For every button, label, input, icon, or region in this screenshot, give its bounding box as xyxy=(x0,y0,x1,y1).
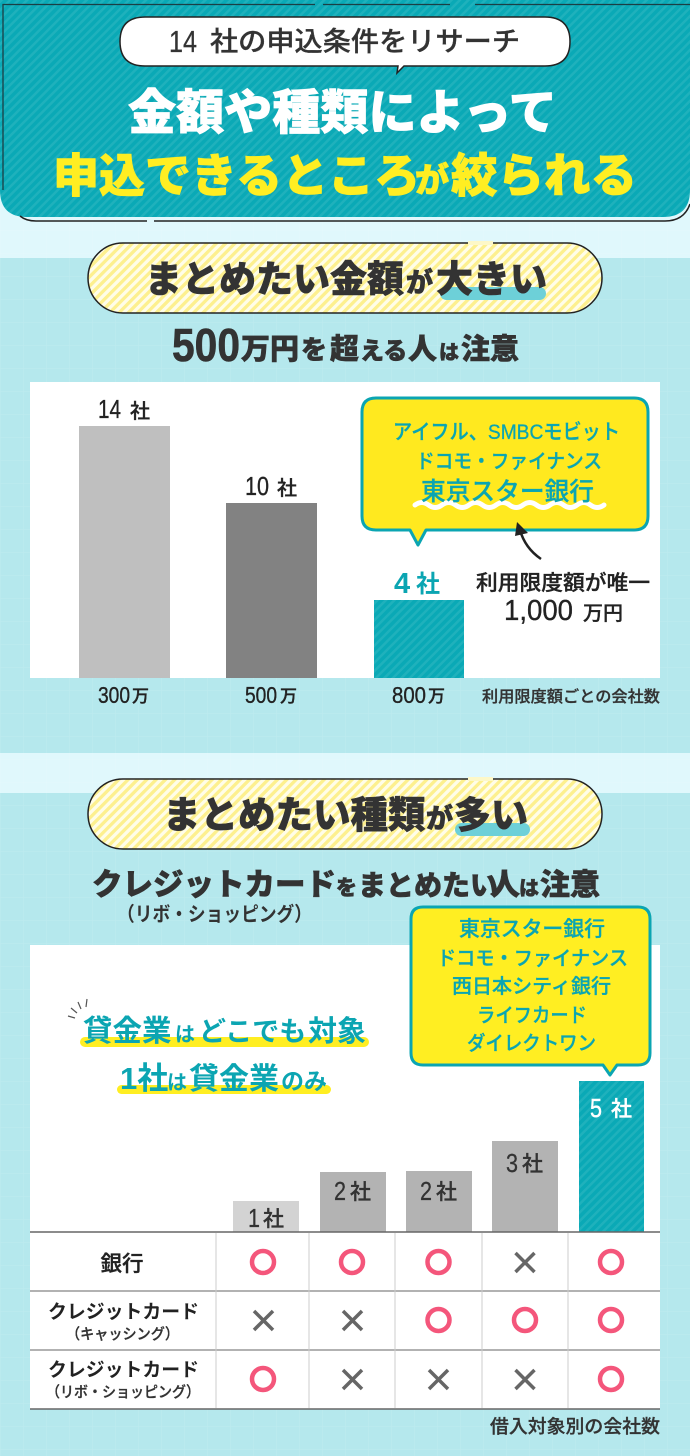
annotation: only 10 million limit xyxy=(476,572,650,627)
section heading pill: types xyxy=(88,777,602,849)
section subtitle: credit card: （リボ・ショッピング） xyxy=(117,902,312,926)
section subtitle: over 5 million yen: を xyxy=(301,335,327,365)
arrow to callout xyxy=(515,522,541,559)
section subtitle: credit card: 人 xyxy=(490,869,520,902)
row labels: （キャッシング） xyxy=(66,1326,179,1343)
row labels xyxy=(46,1252,200,1401)
row labels: クレジットカード xyxy=(48,1301,199,1323)
speech pill: 14 companies researched: 14 xyxy=(169,24,197,59)
callout: five companies xyxy=(411,907,650,1075)
callout: text with emphasis xyxy=(68,999,369,1096)
bar: 800万 4社: 4 xyxy=(394,568,410,600)
bar: 2社: 社 xyxy=(350,1181,371,1204)
sparkle accent xyxy=(68,999,87,1018)
bar: 3社: 社 xyxy=(522,1153,543,1176)
bar: 500万 10社: 10 xyxy=(245,471,269,501)
header banner xyxy=(0,0,690,221)
axis labels: 300 xyxy=(98,682,130,708)
callout: companies: ドコモ・ファイナンス xyxy=(416,451,602,473)
title line 1: 金額や種類によって xyxy=(128,87,557,140)
bar: 2社 xyxy=(406,1171,472,1232)
bar: 5社: 5 xyxy=(590,1093,602,1123)
callout: text with emphasis: のみ xyxy=(281,1068,327,1094)
bar: 800万 4社: 社 xyxy=(416,571,440,598)
row labels: 銀行 xyxy=(100,1252,144,1276)
row labels: クレジットカード xyxy=(48,1359,199,1381)
section subtitle: over 5 million yen: は xyxy=(439,342,459,364)
marker highlight xyxy=(440,287,546,300)
bar: 800万 4社 xyxy=(374,568,464,678)
callout: companies xyxy=(362,398,648,545)
callout: text with emphasis: 貸金業 xyxy=(189,1063,279,1096)
section subtitle: credit card xyxy=(92,868,600,926)
footnote: 借入対象別の会社数 xyxy=(490,1416,660,1437)
circle marks xyxy=(252,1251,622,1390)
section subtitle: credit card: 注意 xyxy=(540,869,600,902)
axis labels xyxy=(98,682,660,708)
section heading pill: amount: まとめたい金額 xyxy=(145,259,404,300)
axis labels: 800 xyxy=(392,682,426,708)
axis labels: 500 xyxy=(245,682,277,708)
bar: 5社: 社 xyxy=(611,1098,632,1121)
section heading pill: types: 多い xyxy=(454,795,528,836)
section subtitle: credit card: を xyxy=(336,877,357,900)
section subtitle: over 5 million yen: える xyxy=(360,338,407,365)
title line 2: 申込できるところ xyxy=(53,150,420,202)
section heading pill: amount: 大きい xyxy=(436,259,547,300)
bar: 1社: 1 xyxy=(248,1203,260,1233)
section subtitle: credit card: は xyxy=(519,878,539,900)
section subtitle: credit card: クレジットカード xyxy=(92,868,336,902)
section heading pill: types: が xyxy=(426,803,453,834)
annotation: only 10 million limit: 利用限度額が唯一 xyxy=(476,572,650,595)
section subtitle: credit card: まとめたい xyxy=(358,870,498,901)
section subtitle: over 5 million yen: 人 xyxy=(408,334,437,366)
axis labels: 万 xyxy=(280,687,297,706)
section heading pill: amount xyxy=(88,241,602,313)
row labels: （リボ・ショッピング） xyxy=(46,1384,200,1401)
annotation: only 10 million limit: 万円 xyxy=(583,603,623,625)
bar: 3社 xyxy=(492,1141,558,1232)
cross marks xyxy=(254,1253,534,1389)
bar: 2社: 2 xyxy=(420,1176,432,1206)
bar: 300万 14社 xyxy=(79,394,170,678)
panel: card type chart xyxy=(30,945,660,1409)
title line 2: 絞られる xyxy=(451,150,637,202)
title line 2: が xyxy=(415,161,449,200)
bar: 3社: 3 xyxy=(506,1148,518,1178)
bar: 300万 14社: 14 xyxy=(98,394,121,424)
section heading pill: types: まとめたい種類 xyxy=(163,794,426,836)
bar: 500万 10社 xyxy=(226,471,317,678)
axis labels: 万 xyxy=(132,687,149,706)
underlines xyxy=(80,1037,369,1047)
bar: 500万 10社: 社 xyxy=(277,477,297,500)
panel: limit bar chart xyxy=(30,382,660,678)
marker highlight xyxy=(455,823,530,836)
callout: text with emphasis: は xyxy=(167,1072,187,1094)
axis labels: 万 xyxy=(428,687,445,706)
speech pill: 14 companies researched xyxy=(120,17,570,73)
callout: text with emphasis: 対象 xyxy=(308,1015,366,1048)
comparison table xyxy=(30,1232,660,1409)
bar: 1社 xyxy=(233,1201,299,1233)
section subtitle: over 5 million yen: 注意 xyxy=(461,333,519,366)
section heading pill: amount: が xyxy=(406,267,433,298)
callout: five companies: 西日本シティ銀行 xyxy=(452,975,611,998)
speech pill: 14 companies researched: 社の申込条件をリサーチ xyxy=(210,27,520,57)
annotation: only 10 million limit: 1,000 xyxy=(504,595,573,627)
callout: five companies: ドコモ・ファイナンス xyxy=(437,948,628,970)
axis labels: 利用限度額ごとの会社数 xyxy=(482,688,660,706)
callout: companies: アイフル、SMBCモビット xyxy=(393,421,620,444)
bar: 2社: 2 xyxy=(334,1176,346,1206)
bar: 1社: 社 xyxy=(263,1208,284,1231)
section subtitle: over 5 million yen xyxy=(172,319,519,371)
callout: text with emphasis: は xyxy=(175,1024,195,1046)
callout: text with emphasis: 1社 xyxy=(120,1061,168,1096)
callout: five companies: 東京スター銀行 xyxy=(459,918,605,941)
bar: 5社 xyxy=(579,1081,644,1232)
bar: 2社 xyxy=(320,1172,386,1232)
bar: 2社: 社 xyxy=(436,1181,457,1204)
callout: five companies: ライフカード xyxy=(477,1005,587,1027)
section subtitle: over 5 million yen: 超 xyxy=(330,333,359,366)
bar: 300万 14社: 社 xyxy=(130,400,150,423)
callout: text with emphasis: 貸金業 xyxy=(83,1015,172,1048)
section subtitle: over 5 million yen: 万円 xyxy=(241,334,299,366)
callout: companies: 東京スター銀行 xyxy=(421,478,594,506)
section subtitle: over 5 million yen: 500 xyxy=(172,319,240,371)
callout: text with emphasis: どこでも xyxy=(199,1017,306,1047)
callout: five companies: ダイレクトワン xyxy=(467,1032,596,1055)
wavy underline xyxy=(415,502,604,508)
